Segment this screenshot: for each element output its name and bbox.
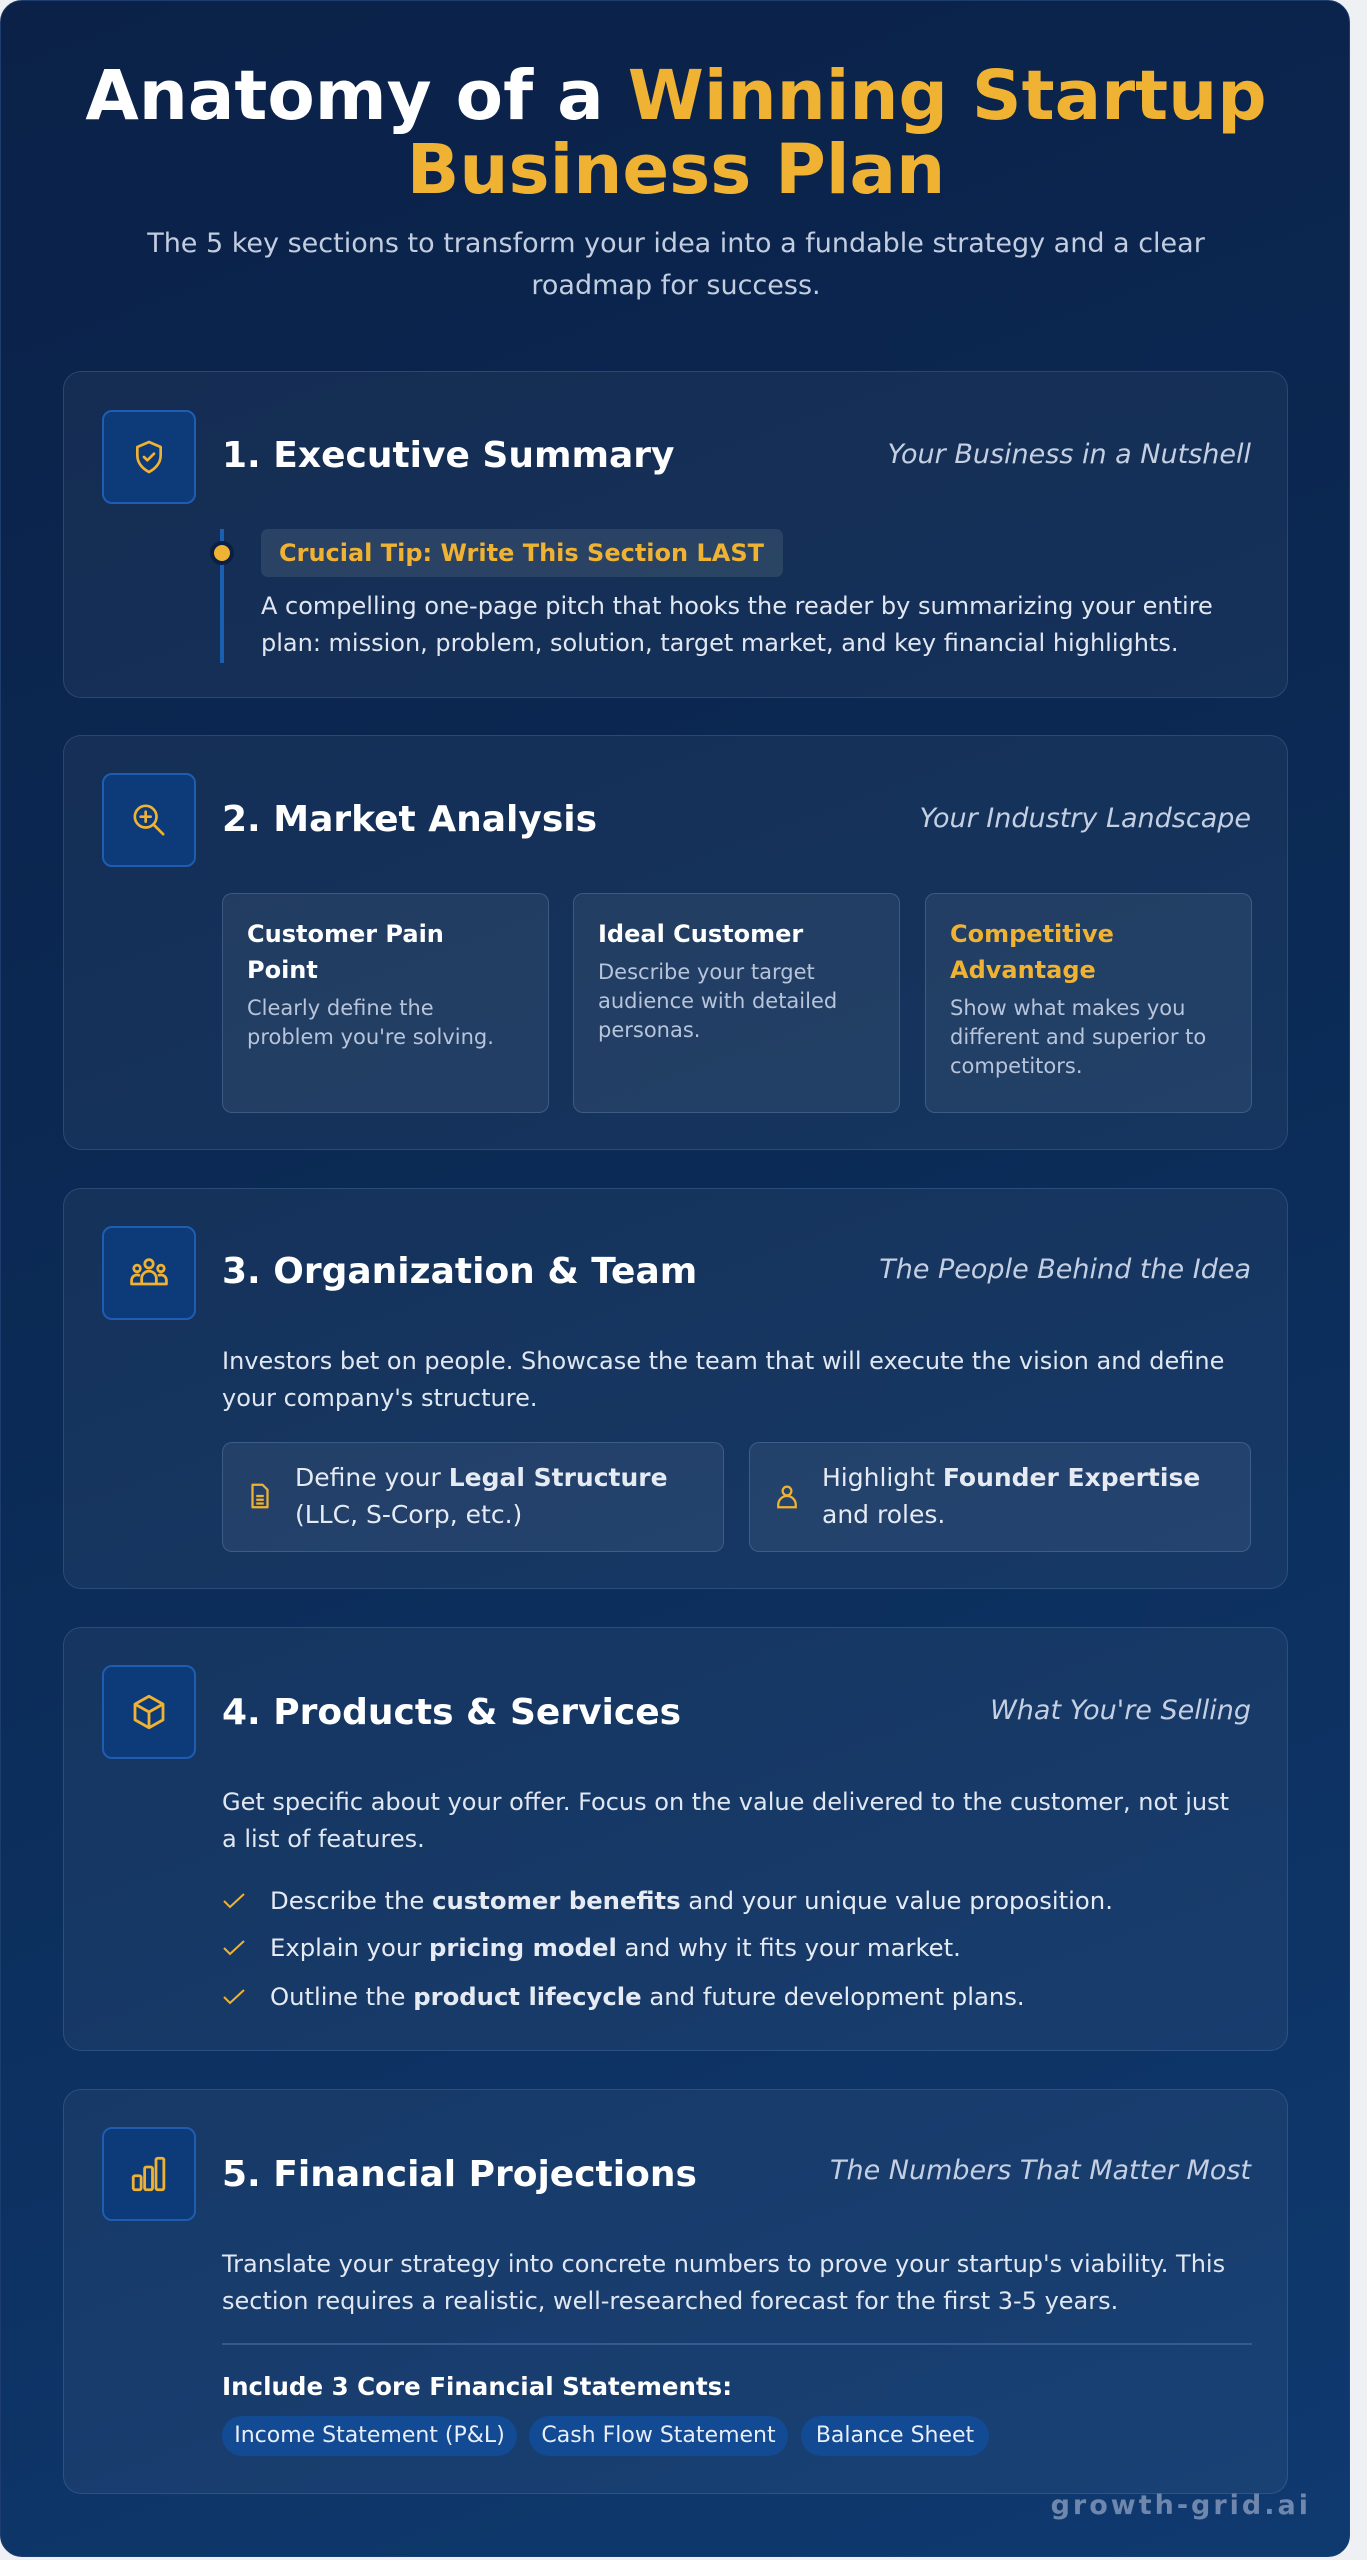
card: pain point: Clearly define the problem you're solving.: [247, 996, 494, 1049]
subheading: The Numbers That Matter Most: [830, 2155, 1251, 2186]
panel: financial projections: [63, 2089, 1288, 2494]
icon: shield: [102, 410, 196, 504]
pill: balance sheet: Balance Sheet: [816, 2423, 974, 2448]
box: founder expertise: Highlight Founder Expertise and roles.: [822, 1463, 1200, 1529]
tip: [261, 529, 783, 577]
description: Translate your strategy into concrete numbers to prove your startup's viability. This section requires a realistic, well-researched forecast for the first 3-5 years.: [222, 2250, 1225, 2315]
heading: 3. Organization & Team: [222, 1251, 697, 1292]
box: legal structure: [222, 1442, 724, 1552]
panel: executive summary: [63, 371, 1288, 698]
heading: 2. Market Analysis: [222, 799, 597, 840]
icon: box: [102, 1665, 196, 1759]
heading: 4. Products & Services: [222, 1692, 681, 1733]
subheading: The People Behind the Idea: [879, 1254, 1251, 1285]
watermark: growth-grid.ai: [1051, 2490, 1311, 2521]
pill: cash flow: Cash Flow Statement: [541, 2423, 776, 2448]
description: A compelling one-page pitch that hooks the reader by summarizing your entire plan: mission, problem, solution, target market, and key financial highlights.: [261, 592, 1213, 657]
icon: search: [102, 773, 196, 867]
description: Investors bet on people. Showcase the team that will execute the vision and define your company's structure.: [222, 1347, 1224, 1412]
panel: market analysis: [63, 735, 1288, 1150]
subheading: What You're Selling: [990, 1695, 1251, 1726]
subheading: Your Industry Landscape: [919, 803, 1251, 834]
timeline: [220, 529, 224, 663]
tip: Crucial Tip: Write This Section LAST: [279, 539, 764, 567]
panel: products & services: [63, 1627, 1288, 2051]
icon: team: [102, 1226, 196, 1320]
card: competitive advantage: Show what makes you different and superior to competitors.: [950, 996, 1206, 1078]
card: ideal customer: Describe your target audience with detailed personas.: [598, 960, 837, 1042]
timeline dot: [210, 541, 234, 565]
box: legal structure: Define your Legal Structure (LLC, S-Corp, etc.): [295, 1463, 668, 1529]
subheading: Your Business in a Nutshell: [888, 439, 1251, 470]
card: pain point: Customer Pain Point: [247, 920, 444, 984]
card: competitive advantage: [925, 893, 1252, 1113]
pill: income statement: Income Statement (P&L): [234, 2423, 505, 2448]
card: pain point: [222, 893, 549, 1113]
panel: organization & team: [63, 1188, 1288, 1589]
heading: 5. Financial Projections: [222, 2154, 697, 2195]
box: founder expertise: [749, 1442, 1251, 1552]
card: competitive advantage: Competitive Advantage: [950, 920, 1114, 984]
description: Get specific about your offer. Focus on the value delivered to the customer, not just a list of features.: [222, 1788, 1229, 1853]
heading: 1. Executive Summary: [222, 435, 675, 476]
pill: balance sheet: [801, 2416, 989, 2456]
title: Anatomy of a Winning Startup Business Plan: [85, 56, 1267, 210]
pill: income statement: [222, 2416, 517, 2456]
checklist item 3: Outline the product lifecycle and future development plans.: [270, 1982, 1025, 2011]
pill: cash flow: [529, 2416, 788, 2456]
checklist item 1: Describe the customer benefits and your unique value proposition.: [270, 1886, 1113, 1915]
subtitle: The 5 key sections to transform your idea into a fundable strategy and a clear roadmap for success.: [147, 228, 1205, 301]
icon: bar chart: [102, 2127, 196, 2221]
card: ideal customer: Ideal Customer: [598, 920, 803, 948]
checklist item 2: Explain your pricing model and why it fits your market.: [270, 1933, 961, 1962]
statements heading: Include 3 Core Financial Statements:: [222, 2372, 732, 2401]
card: ideal customer: [573, 893, 900, 1113]
